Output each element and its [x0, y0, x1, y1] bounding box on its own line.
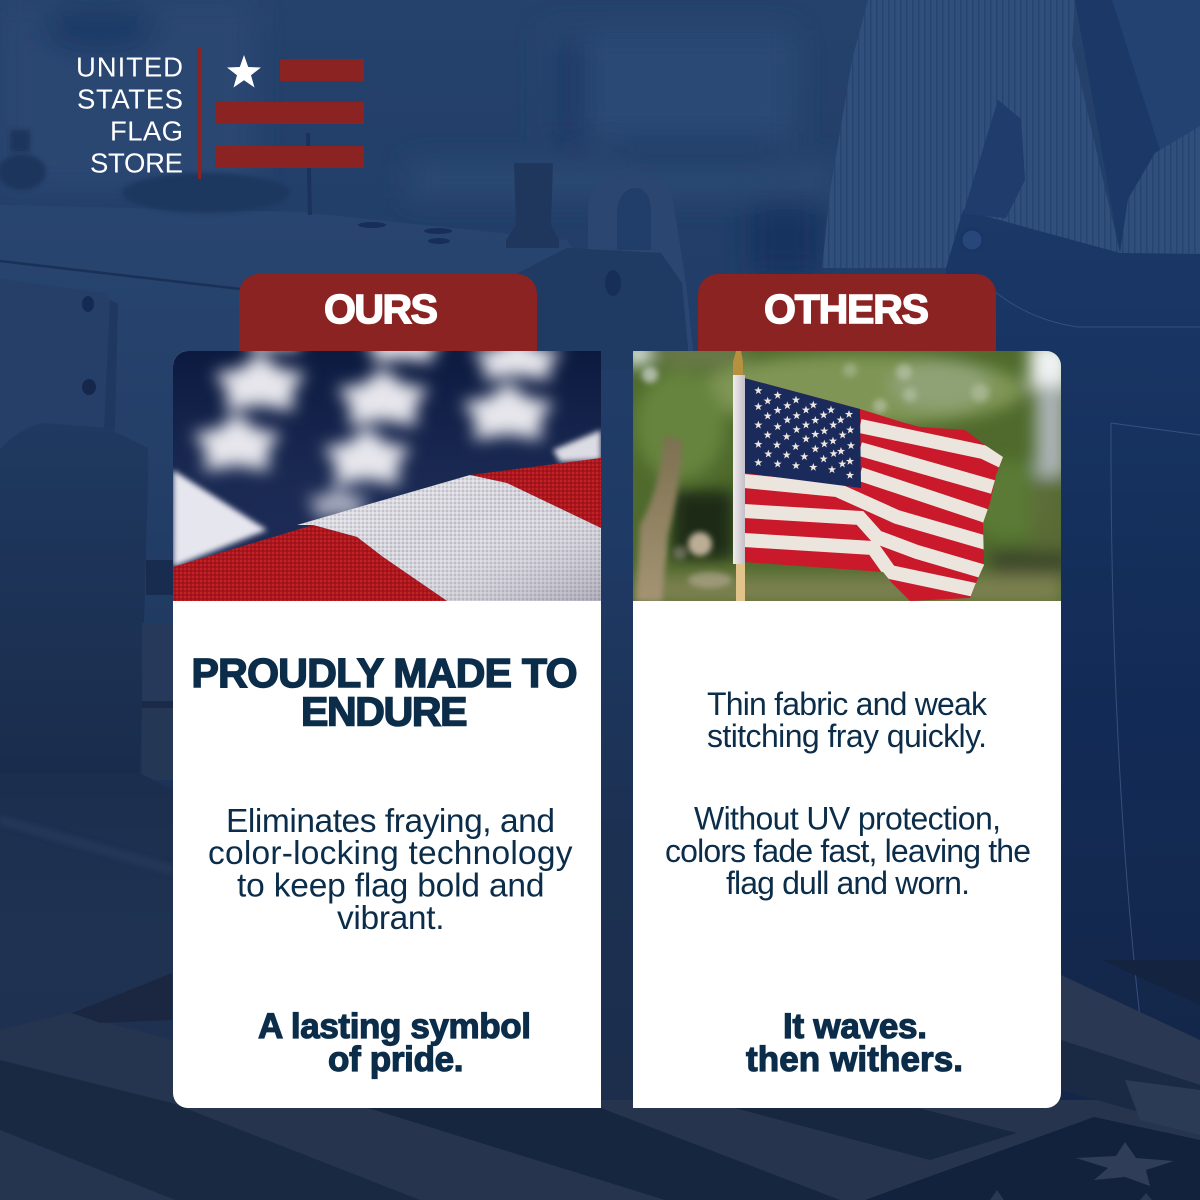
photo: close-up of durable flag fabric [173, 351, 601, 601]
closing line: ours: A lasting symbol [258, 1007, 531, 1046]
panel: others [625, 342, 1070, 1108]
closing line: others [746, 1007, 963, 1079]
logo wordmark [76, 52, 183, 178]
panel: ours [173, 323, 601, 1108]
body text: ours: to keep flag bold and [237, 868, 544, 904]
body text: others, fading: flag dull and worn. [726, 865, 970, 901]
body text: ours: vibrant. [337, 900, 444, 937]
striped shirt [822, 0, 1200, 268]
logo divider [198, 47, 201, 179]
machine lower body [0, 423, 148, 773]
body text: ours [208, 803, 573, 937]
closing line: others: It waves. [783, 1007, 927, 1046]
body text: others, fabric [707, 686, 988, 754]
spool [506, 163, 559, 248]
logo wordmark: STORE [90, 148, 183, 178]
body text: ours: color-locking technology [208, 835, 573, 872]
heading: proudly made to endure: ENDURE [301, 688, 468, 734]
closing line: ours [258, 1007, 531, 1079]
photo: worn flag on a pole [625, 342, 1070, 605]
logo wordmark: STATES [77, 84, 183, 114]
tab: others: OTHERS [764, 286, 929, 332]
closing line: ours: of pride. [328, 1040, 464, 1079]
body text: others, fading: Without UV protection, [694, 800, 1001, 836]
heading: proudly made to endure [192, 650, 578, 734]
flag sleeve [733, 375, 745, 564]
blurred upper background [0, 0, 838, 275]
pole [736, 560, 745, 601]
body text: others, fabric: Thin fabric and weak [707, 686, 988, 722]
body text: others, fabric: stitching fray quickly. [707, 718, 987, 754]
logo wordmark: UNITED [76, 52, 183, 82]
machine plate with screw holes [0, 279, 110, 449]
logo: United States Flag Store [76, 47, 364, 179]
body text: others, fading [665, 800, 1031, 901]
tab: ours: OURS [324, 286, 438, 332]
tab: others [698, 274, 996, 351]
flag star on the table [1076, 1142, 1174, 1186]
body text: ours: Eliminates fraying, and [226, 803, 555, 840]
apron [946, 210, 1200, 1200]
body text: others, fading: colors fade fast, leaving the [665, 833, 1031, 869]
tab: ours [239, 274, 537, 351]
logo wordmark: FLAG [110, 116, 183, 146]
closing line: others: then withers. [746, 1040, 963, 1079]
left table surface [0, 773, 173, 1100]
logo flag mark [215, 55, 364, 168]
heading: proudly made to endure: PROUDLY MADE TO [192, 650, 578, 696]
sewing machine table and body [0, 130, 695, 780]
folded flag on the table [0, 960, 1200, 1200]
flag [740, 370, 1010, 605]
machine head with handle [588, 177, 695, 370]
